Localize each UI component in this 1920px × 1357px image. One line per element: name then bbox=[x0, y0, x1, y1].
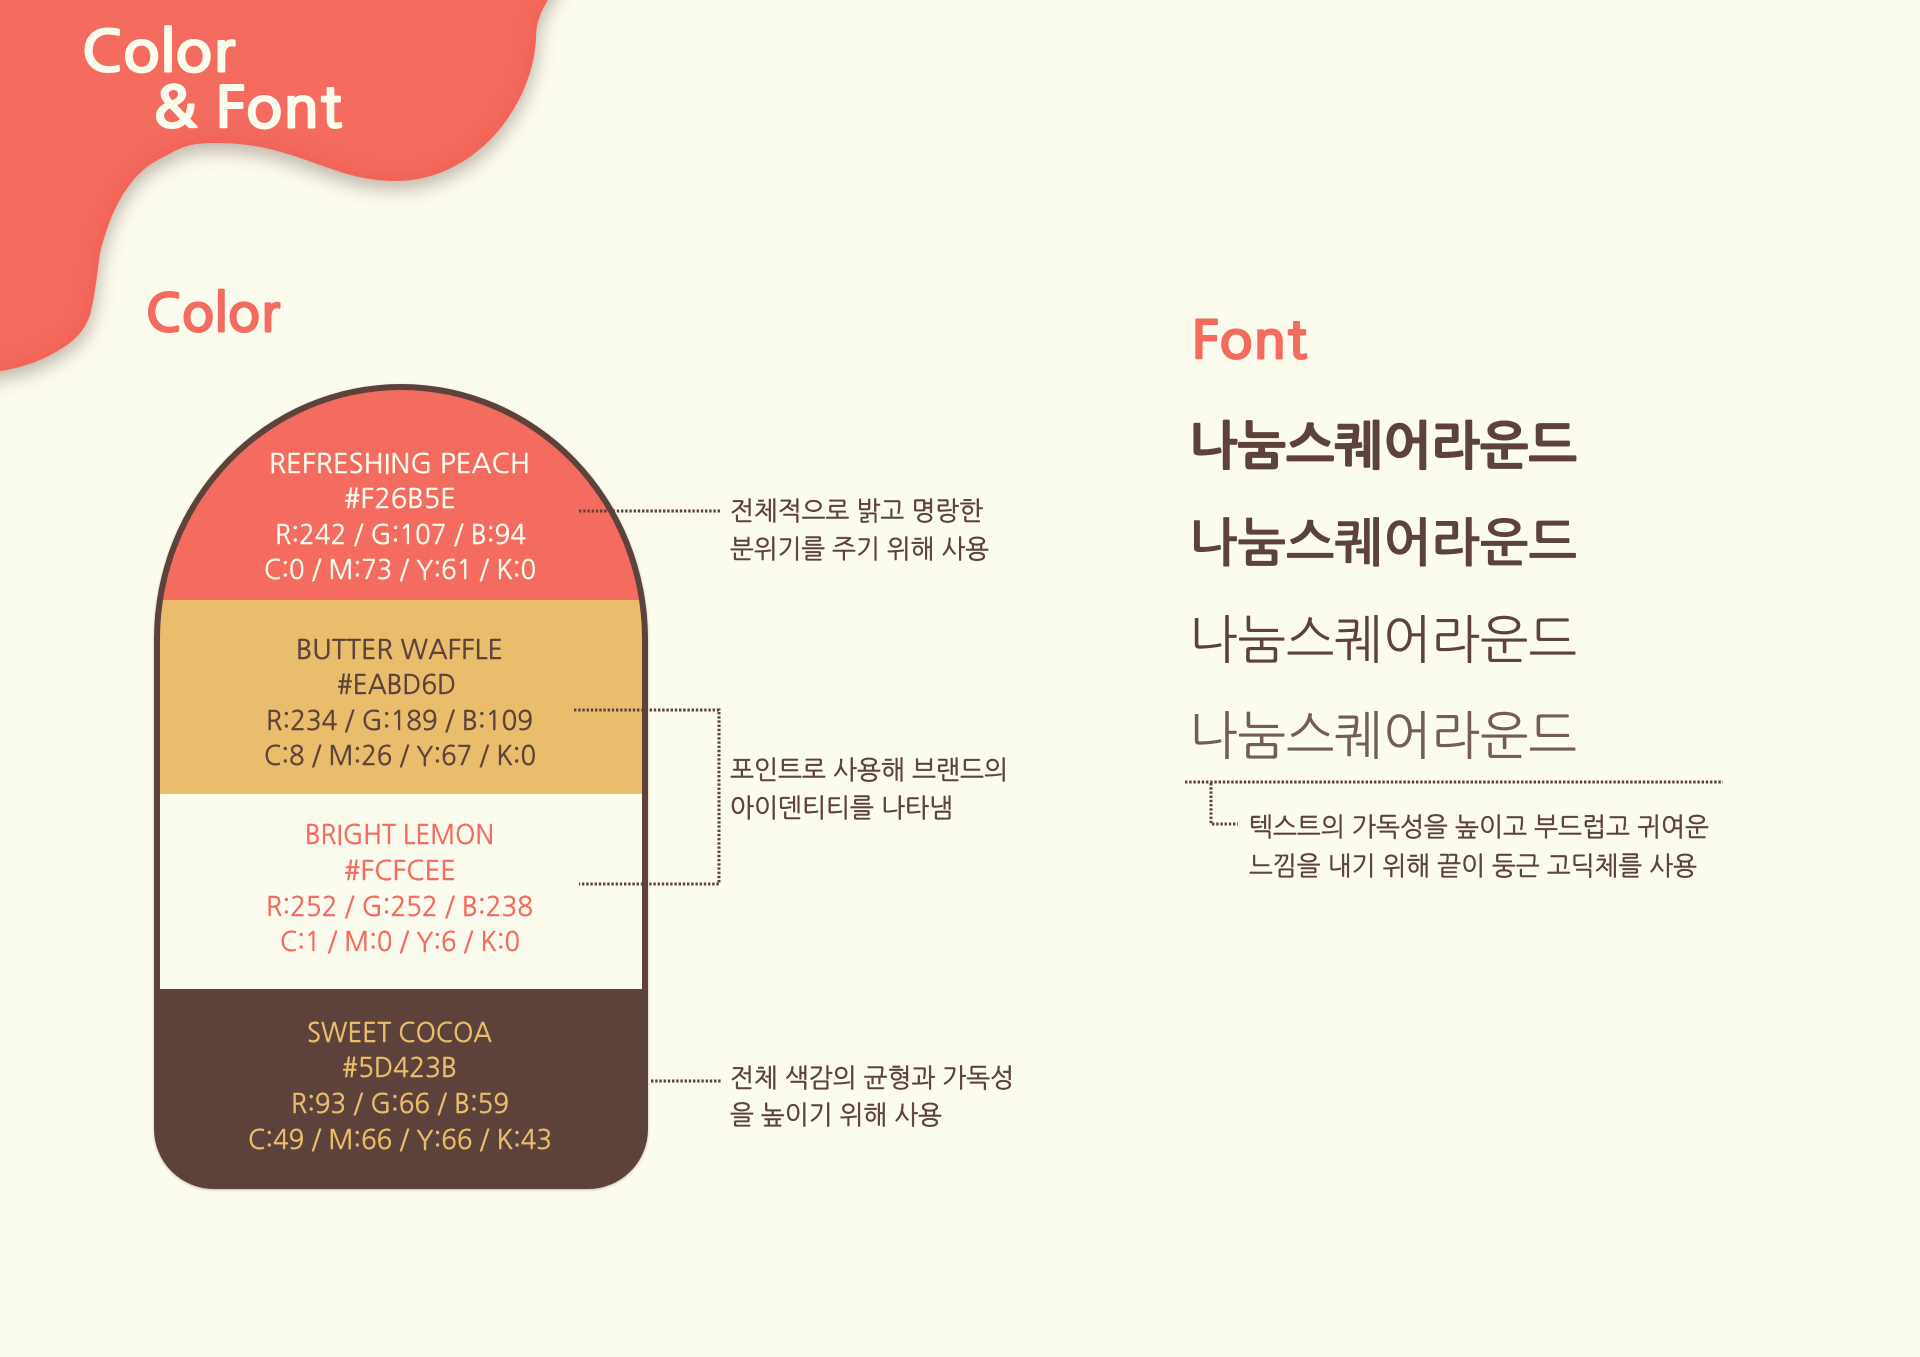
swatch text: sweet cocoa: C:49 / M:66 / Y:66 / K:43 bbox=[248, 1126, 552, 1153]
swatch text: refreshing peach: C:0 / M:73 / Y:61 / K:0 bbox=[264, 556, 536, 583]
swatch text: sweet cocoa bbox=[248, 1019, 552, 1153]
swatch text: refreshing peach: #F26B5E bbox=[344, 485, 456, 512]
font note with leader bbox=[1185, 782, 1723, 879]
arch outline and cocoa swatch bbox=[154, 384, 648, 1189]
title bbox=[81, 25, 342, 137]
swatch text: refreshing peach: R:242 / G:107 / B:94 bbox=[275, 521, 526, 548]
swatch text: butter waffle: BUTTER WAFFLE bbox=[296, 636, 503, 663]
swatch text: sweet cocoa: #5D423B bbox=[342, 1054, 457, 1081]
swatch text: bright lemon bbox=[266, 821, 533, 955]
swatch text: butter waffle: C:8 / M:26 / Y:67 / K:0 bbox=[264, 742, 536, 769]
swatch text: sweet cocoa: R:93 / G:66 / B:59 bbox=[291, 1090, 509, 1117]
header blob bbox=[0, 0, 590, 385]
swatches: peach, butter, lemon bbox=[150, 380, 650, 989]
swatch text: butter waffle: #EABD6D bbox=[337, 671, 456, 698]
callout: cocoa bbox=[651, 1065, 1014, 1128]
callout: butter and lemon: 아이덴티티를 나타냄 bbox=[730, 795, 953, 821]
swatch text: bright lemon: R:252 / G:252 / B:238 bbox=[266, 893, 533, 920]
sample: regular: 나눔스퀘어라운드 bbox=[1189, 614, 1577, 666]
sample: light: 나눔스퀘어라운드 bbox=[1189, 710, 1577, 762]
callout: peach: 전체적으로 밝고 명랑한 bbox=[730, 498, 983, 524]
sample: extra bold: 나눔스퀘어라운드 bbox=[1189, 420, 1577, 472]
callout: peach bbox=[579, 498, 989, 562]
heading: Font: Font bbox=[1191, 314, 1308, 367]
heading: Color: Color bbox=[145, 287, 281, 340]
swatch text: sweet cocoa: SWEET COCOA bbox=[307, 1019, 492, 1046]
swatch text: butter waffle bbox=[264, 636, 536, 769]
title: & Font bbox=[153, 81, 342, 137]
swatch text: bright lemon: BRIGHT LEMON bbox=[305, 821, 494, 848]
sample: bold: 나눔스퀘어라운드 bbox=[1189, 517, 1577, 569]
font weight samples bbox=[1189, 420, 1577, 762]
callout: cocoa: 전체 색감의 균형과 가독성 bbox=[730, 1065, 1014, 1091]
swatch text: bright lemon: C:1 / M:0 / Y:6 / K:0 bbox=[280, 928, 520, 955]
swatch text: refreshing peach: REFRESHING PEACH bbox=[269, 450, 530, 477]
swatch text: bright lemon: #FCFCEE bbox=[344, 857, 456, 884]
font note with leader: 텍스트의 가독성을 높이고 부드럽고 귀여운 bbox=[1249, 814, 1709, 840]
panel: colour swatch arch bbox=[150, 380, 650, 1189]
callout: butter and lemon: 포인트로 사용해 브랜드의 bbox=[730, 757, 1008, 783]
callout: peach: 분위기를 주기 위해 사용 bbox=[730, 536, 989, 562]
font note with leader: 느낌을 내기 위해 끝이 둥근 고딕체를 사용 bbox=[1249, 853, 1697, 879]
callout: cocoa: 을 높이기 위해 사용 bbox=[730, 1102, 942, 1128]
swatch text: butter waffle: R:234 / G:189 / B:109 bbox=[266, 707, 533, 734]
swatch text: refreshing peach bbox=[264, 450, 536, 583]
callout: butter and lemon bbox=[574, 710, 1008, 884]
title: Color bbox=[81, 25, 235, 81]
